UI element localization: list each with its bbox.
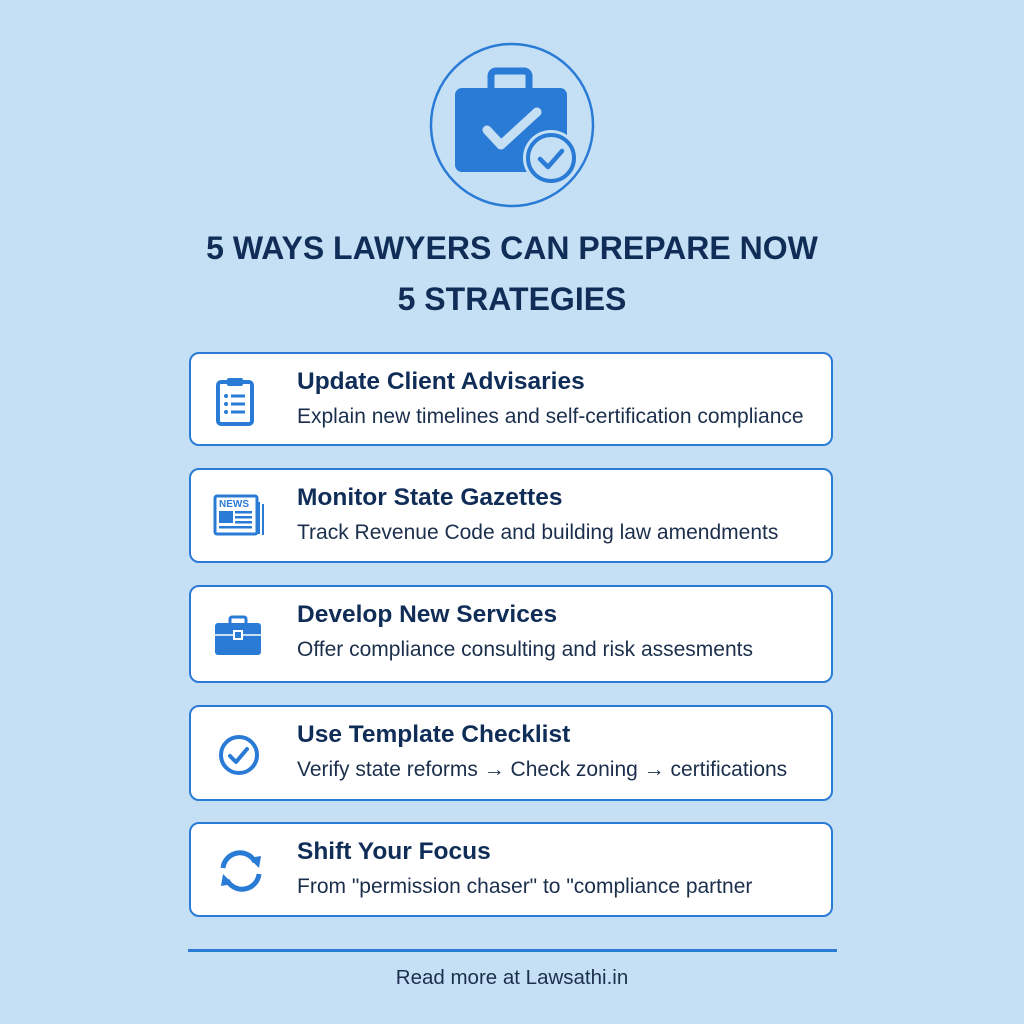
- title: 5 WAYS LAWYERS CAN PREPARE NOW: [206, 230, 818, 266]
- card 1: [189, 352, 833, 446]
- divider line: [188, 949, 837, 952]
- card 5: Shift Your Focus: [297, 838, 491, 865]
- footer: Read more at Lawsathi.in: [396, 966, 628, 989]
- icon: briefcase with check: [430, 42, 594, 208]
- card 3: Develop New Services: [297, 601, 557, 628]
- title: [206, 230, 818, 317]
- card 2: Monitor State Gazettes: [297, 484, 562, 511]
- card 5: From "permission chaser" to "compliance partner: [297, 875, 752, 898]
- icon: newspaper: NEWS: [219, 499, 249, 510]
- card 4: Use Template Checklist: [297, 721, 570, 748]
- icon: check circle: [219, 735, 259, 775]
- title: 5 STRATEGIES: [398, 281, 626, 317]
- icon: briefcase: [215, 616, 261, 655]
- card 5: [189, 822, 833, 917]
- card 4: [189, 705, 833, 801]
- icon: clipboard: [216, 378, 254, 426]
- card 3: Offer compliance consulting and risk assesments: [297, 638, 753, 661]
- card 2: Track Revenue Code and building law amendments: [297, 521, 778, 544]
- card 1: Update Client Advisaries: [297, 368, 585, 395]
- card 1: Explain new timelines and self-certification compliance: [297, 405, 804, 428]
- icon: refresh arrows: [220, 850, 262, 892]
- card 2: [189, 468, 833, 563]
- card 4: Verify state reforms → Check zoning → certifications: [297, 758, 787, 781]
- card 3: [189, 585, 833, 683]
- icon: newspaper: [214, 494, 264, 536]
